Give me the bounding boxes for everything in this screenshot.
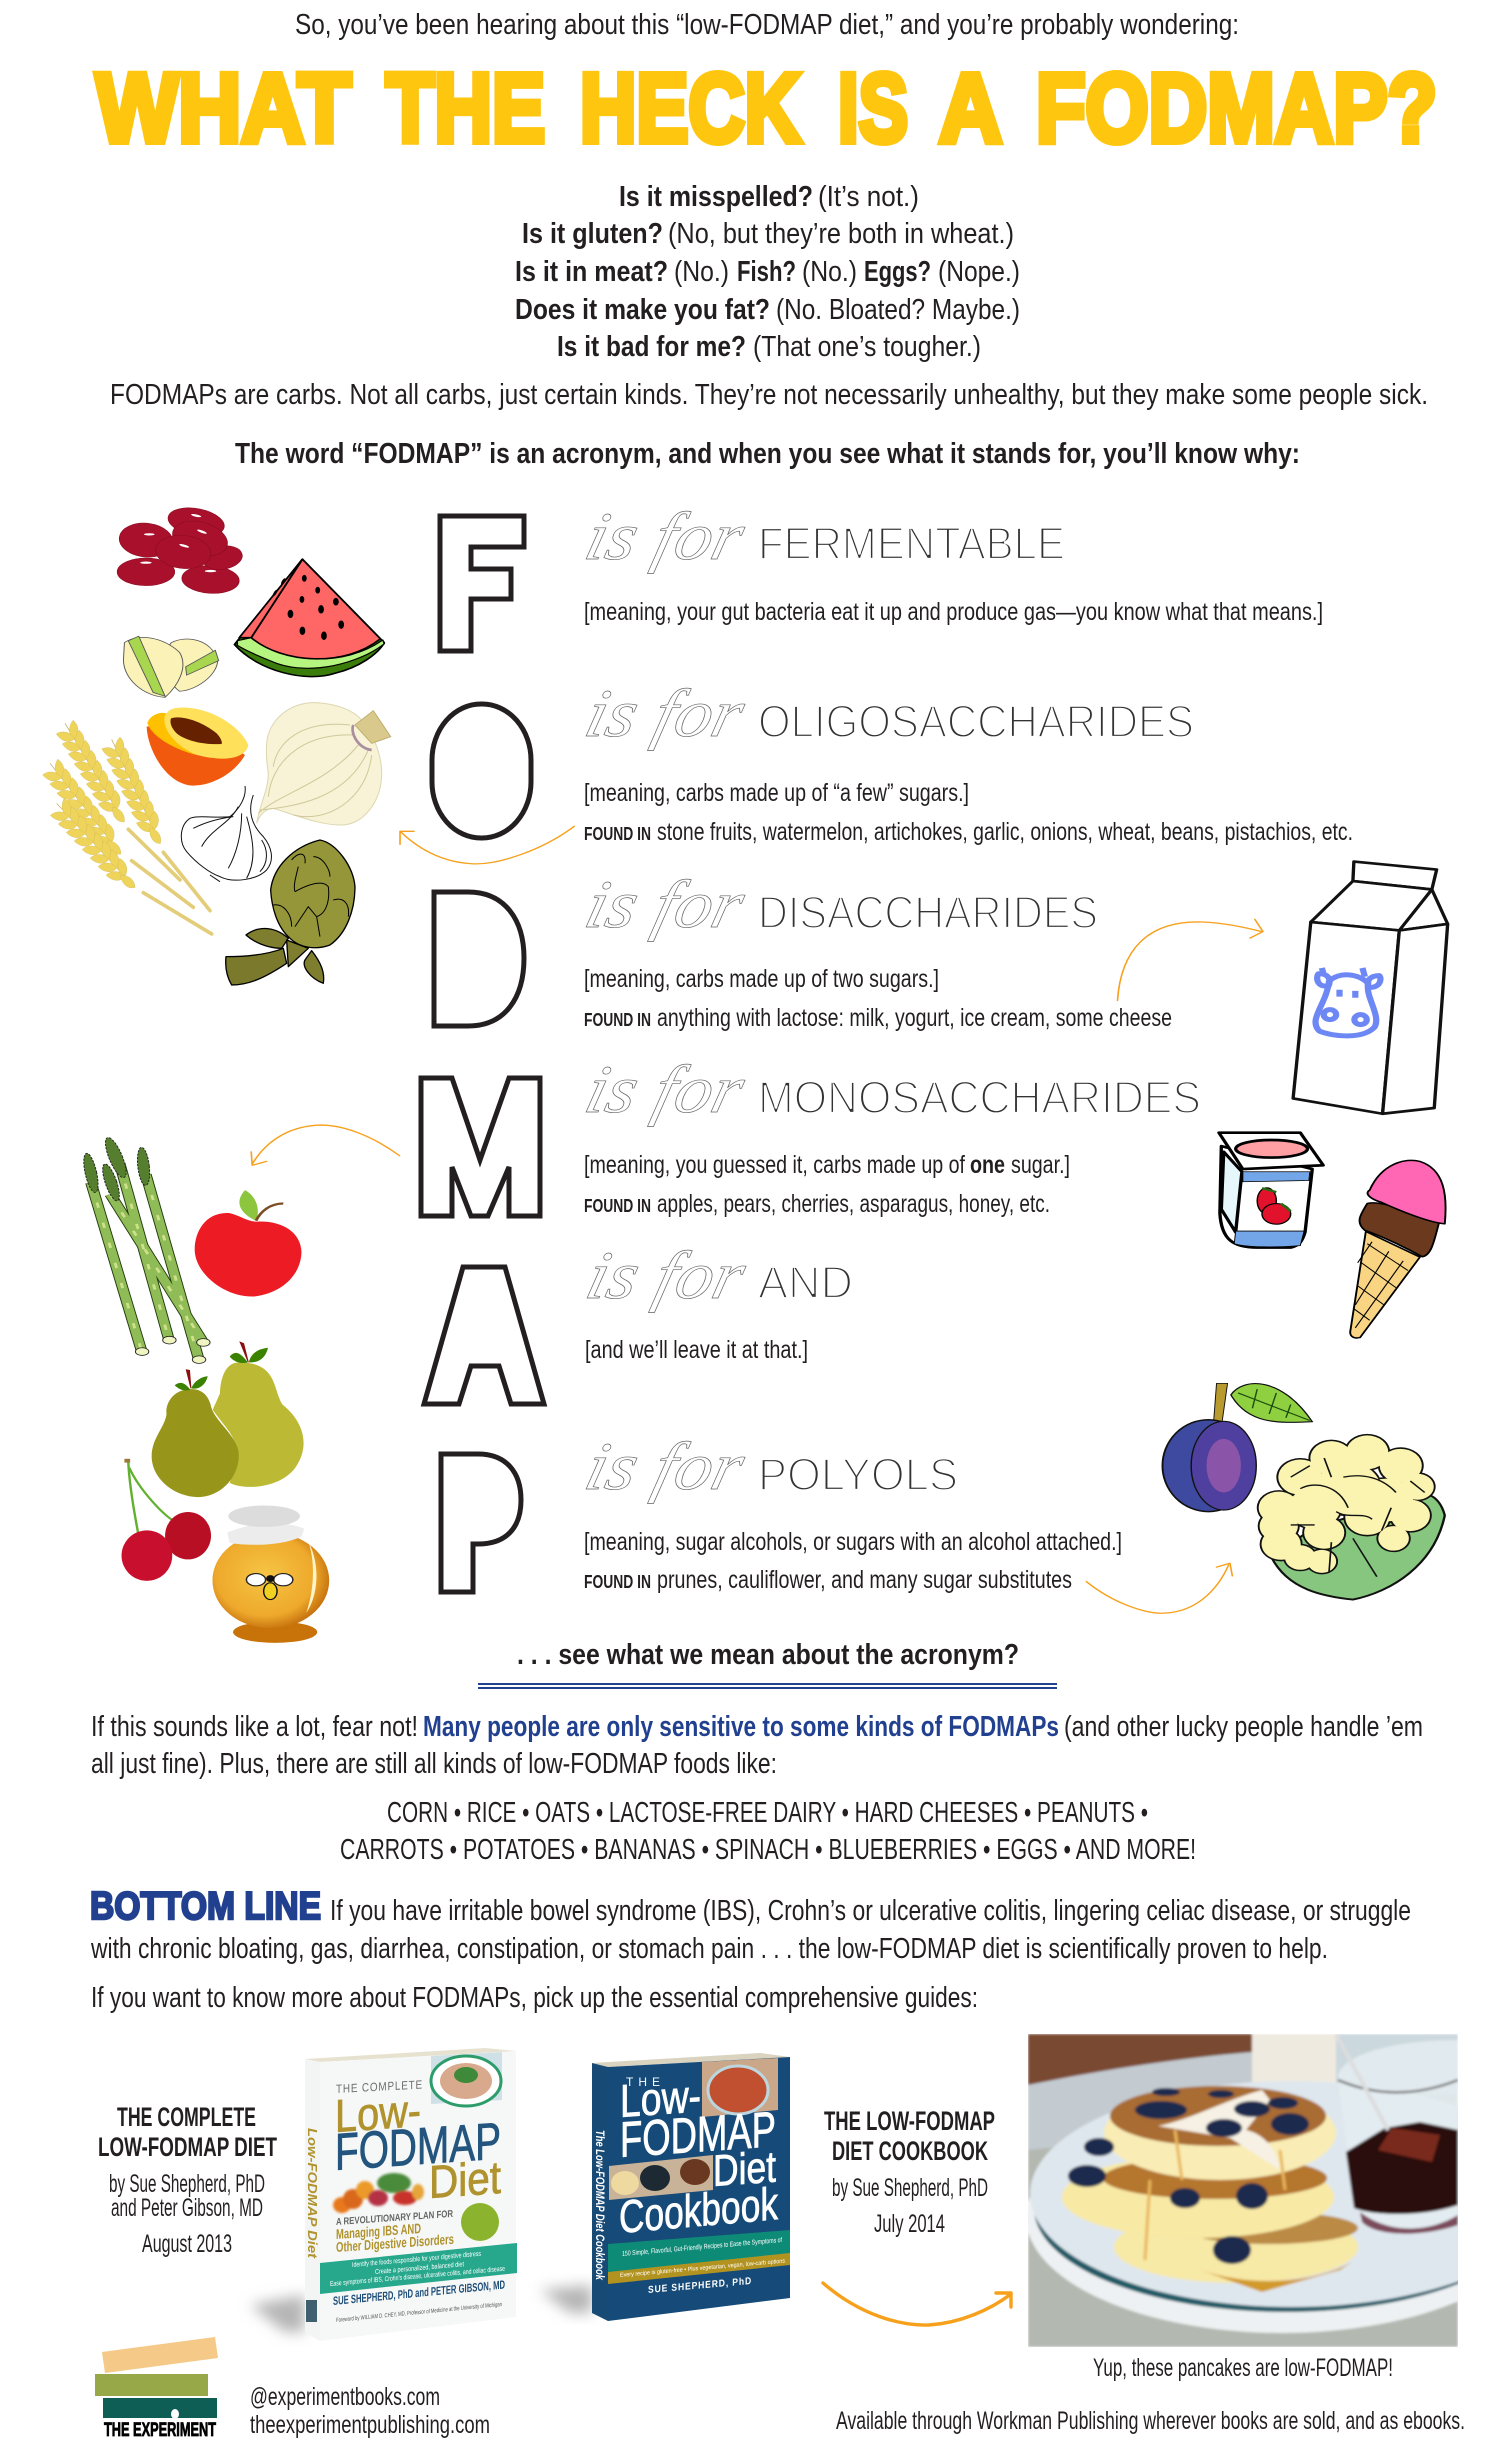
icon: wheat bbox=[38, 716, 212, 934]
sensitivity paragraph: Many people are only sensitive to some kinds of FODMAPs bbox=[423, 1711, 1059, 1743]
book 1 cover: Low- bbox=[335, 2084, 421, 2142]
icon: onion bbox=[257, 703, 391, 825]
book 1 cover: SUE SHEPHERD, PhD and PETER GIBSON, MD bbox=[333, 2277, 505, 2308]
book 1 details: THE COMPLETE bbox=[117, 2102, 256, 2132]
low-FODMAP foods list: CARROTS • POTATOES • BANANAS • SPINACH • BLUEBERRIES • EGGS • AND MORE! bbox=[340, 1834, 1196, 1866]
book 1 cover: Create a personalized, balanced diet bbox=[375, 2261, 464, 2276]
publisher logo bbox=[95, 2337, 218, 2441]
D entry bbox=[578, 866, 1172, 1032]
letter A bbox=[424, 1267, 544, 1404]
icon: cow logo bbox=[1316, 968, 1380, 1036]
icon: asparagus bbox=[81, 1136, 210, 1363]
A entry: is for bbox=[579, 1237, 754, 1313]
book 2 details: DIET COOKBOOK bbox=[832, 2136, 988, 2166]
book 2 cover: THE bbox=[626, 2075, 665, 2089]
book 1 cover: Ease symptoms of IBS, Crohn’s disease, ulcerative colitis, and celiac disease bbox=[330, 2266, 505, 2288]
D entry: anything with lactose: milk, yogurt, ice cream, some cheese bbox=[657, 1004, 1172, 1032]
questions block: Is it misspelled? bbox=[619, 181, 813, 213]
book 1 cover: Diet bbox=[429, 2151, 501, 2208]
letter P bbox=[441, 1454, 521, 1592]
publisher contacts: theexperimentpublishing.com bbox=[250, 2411, 490, 2439]
icon: kidney beans bbox=[116, 503, 246, 595]
lower-right food illustrations bbox=[1086, 1133, 1446, 1613]
M entry: is for bbox=[578, 1051, 753, 1127]
book 1 cover: Foreword by WILLIAM D. CHEY, MD, Professor of Medicine at the University of Michigan bbox=[336, 2302, 502, 2324]
book 2 cover: SUE SHEPHERD, PhD bbox=[648, 2276, 752, 2296]
arrow: to pancakes bbox=[823, 2283, 1011, 2325]
title: HECK bbox=[580, 54, 801, 162]
M entry: one bbox=[970, 1151, 1005, 1179]
sensitivity paragraph bbox=[91, 1711, 1423, 1780]
book 2 cover: Every recipe is gluten-free • Plus vegetarian, vegan, low-carb options bbox=[620, 2259, 785, 2279]
sensitivity paragraph: If this sounds like a lot, fear not! bbox=[91, 1711, 418, 1743]
bottom line paragraph: BOTTOM LINE bbox=[90, 1885, 321, 1928]
P entry bbox=[578, 1428, 1122, 1594]
book 2 details bbox=[824, 2106, 995, 2238]
icon: plum with leaf bbox=[1162, 1383, 1312, 1512]
book 2 cover bbox=[540, 2053, 790, 2321]
book 1 cover: THE COMPLETE bbox=[336, 2077, 423, 2096]
questions block: Fish? bbox=[737, 256, 796, 288]
icon: cauliflower bbox=[1257, 1434, 1445, 1600]
letter M bbox=[421, 1078, 540, 1216]
icon: honey jar bbox=[212, 1505, 329, 1643]
book 1 details: LOW-FODMAP DIET bbox=[98, 2132, 277, 2162]
right-side dairy illustrations bbox=[1117, 862, 1448, 1114]
P entry: POLYOLS bbox=[758, 1449, 958, 1500]
low-FODMAP foods list bbox=[340, 1797, 1196, 1866]
A entry: [and we’ll leave it at that.] bbox=[585, 1336, 808, 1364]
book 1 cover: Other Digestive Disorders bbox=[336, 2231, 454, 2255]
title bbox=[96, 54, 1437, 162]
low-FODMAP foods list: CORN • RICE • OATS • LACTOSE-FREE DAIRY • HARD CHEESES • PEANUTS • bbox=[387, 1797, 1148, 1829]
sensitivity paragraph: all just fine). Plus, there are still all kinds of low-FODMAP foods like: bbox=[91, 1748, 777, 1780]
closing line: . . . see what we mean about the acronym? bbox=[517, 1639, 1019, 1671]
icon: pears bbox=[152, 1341, 304, 1497]
M entry bbox=[578, 1051, 1201, 1218]
O entry: is for bbox=[578, 675, 753, 751]
M entry: MONOSACCHARIDES bbox=[758, 1072, 1201, 1123]
icon: pistachios bbox=[123, 636, 219, 697]
icon: ice cream cone bbox=[1350, 1160, 1446, 1338]
arrow: polyols to foods bbox=[1086, 1563, 1232, 1613]
publisher contacts: @experimentbooks.com bbox=[250, 2383, 440, 2411]
O entry: FOUND IN bbox=[584, 824, 651, 844]
book 2 cover: FODMAP bbox=[620, 2101, 776, 2168]
P entry: FOUND IN bbox=[584, 1572, 651, 1592]
book 1 cover bbox=[250, 2048, 517, 2341]
icon: garlic bbox=[181, 786, 271, 882]
book 2 details: July 2014 bbox=[874, 2210, 945, 2238]
book 1 cover: Low-FODMAP Diet bbox=[305, 2128, 320, 2259]
title: IS bbox=[838, 54, 908, 162]
F entry: is for bbox=[578, 498, 753, 574]
acronym lead-in: The word “FODMAP” is an acronym, and when you see what it stands for, you’ll know why: bbox=[235, 438, 1300, 470]
photo: pancakes bbox=[1026, 2034, 1500, 2347]
D entry: is for bbox=[578, 866, 753, 942]
questions block: (No.) bbox=[674, 256, 729, 288]
P entry: [meaning, sugar alcohols, or sugars with an alcohol attached.] bbox=[584, 1528, 1122, 1556]
icon: apple bbox=[195, 1190, 301, 1297]
questions block: Eggs? bbox=[864, 256, 931, 288]
questions block: Is it gluten? bbox=[522, 218, 663, 250]
M entry: sugar.] bbox=[1011, 1151, 1070, 1179]
guides lead-in: If you want to know more about FODMAPs, pick up the essential comprehensive guides: bbox=[91, 1982, 978, 2014]
questions block: (No. Bloated? Maybe.) bbox=[776, 294, 1020, 326]
icon: yogurt cup bbox=[1219, 1133, 1323, 1248]
arrow: disaccharides to milk bbox=[1117, 919, 1263, 1000]
book 2 cover: The Low-FODMAP Diet Cookbook bbox=[593, 2130, 607, 2281]
publisher logo: THE EXPERIMENT bbox=[104, 2420, 216, 2441]
questions block: Is it bad for me? bbox=[557, 331, 746, 363]
F entry bbox=[578, 498, 1323, 626]
bottom line paragraph bbox=[90, 1885, 1411, 1965]
D entry: FOUND IN bbox=[584, 1010, 651, 1030]
book 1 details bbox=[98, 2102, 277, 2258]
O entry bbox=[578, 675, 1353, 846]
F entry: FERMENTABLE bbox=[758, 518, 1065, 569]
book 2 cover: Cookbook bbox=[619, 2177, 779, 2243]
book 1 cover: FODMAP bbox=[335, 2112, 501, 2182]
questions block: (Nope.) bbox=[938, 256, 1020, 288]
arrow: oligosaccharides to foods bbox=[400, 826, 574, 864]
P entry: prunes, cauliflower, and many sugar substitutes bbox=[657, 1566, 1072, 1594]
icon: cherries bbox=[122, 1459, 211, 1581]
title: THE bbox=[386, 54, 545, 162]
book 1 details: and Peter Gibson, MD bbox=[111, 2194, 263, 2222]
arrow: monosaccharides to foods bbox=[251, 1125, 400, 1165]
book 2 cover: Diet bbox=[713, 2143, 776, 2196]
questions block: (It’s not.) bbox=[818, 181, 919, 213]
questions block bbox=[515, 181, 1020, 363]
book 1 cover: A REVOLUTIONARY PLAN FOR bbox=[336, 2209, 454, 2228]
book 2 details: by Sue Shepherd, PhD bbox=[832, 2174, 988, 2202]
icon: milk carton bbox=[1293, 862, 1448, 1114]
upper-left food illustrations bbox=[116, 503, 384, 697]
book 1 details: by Sue Shepherd, PhD bbox=[109, 2170, 265, 2198]
middle-left food illustrations bbox=[38, 703, 391, 985]
title: WHAT bbox=[96, 54, 351, 162]
questions block: Is it in meat? bbox=[515, 256, 668, 288]
icon: stone fruit half bbox=[147, 708, 248, 786]
publisher contacts bbox=[250, 2383, 490, 2439]
M entry: FOUND IN bbox=[584, 1196, 651, 1216]
F entry: [meaning, your gut bacteria eat it up and produce gas—you know what that means.] bbox=[584, 598, 1323, 626]
M entry: [meaning, you guessed it, carbs made up of bbox=[584, 1151, 965, 1179]
O entry: OLIGOSACCHARIDES bbox=[758, 696, 1194, 747]
title: A bbox=[939, 54, 1002, 162]
icon: watermelon slice bbox=[234, 559, 384, 677]
P entry: is for bbox=[578, 1428, 753, 1504]
letter D bbox=[434, 892, 524, 1026]
icon: artichoke bbox=[226, 840, 355, 985]
book 1 cover: Identify the foods responsible for your digestive distress bbox=[352, 2251, 481, 2269]
M entry: apples, pears, cherries, asparagus, honey, etc. bbox=[657, 1190, 1050, 1218]
double rule bbox=[478, 1683, 1057, 1689]
book 1 details: August 2013 bbox=[142, 2230, 232, 2258]
D entry: DISACCHARIDES bbox=[758, 887, 1098, 938]
D entry: [meaning, carbs made up of two sugars.] bbox=[584, 965, 939, 993]
lower-left food illustrations bbox=[81, 1125, 400, 1643]
A entry: AND bbox=[758, 1257, 853, 1308]
letter F bbox=[440, 516, 524, 651]
questions block: (That one’s tougher.) bbox=[753, 331, 981, 363]
intro line: So, you’ve been hearing about this “low-FODMAP diet,” and you’re probably wondering: bbox=[295, 9, 1239, 41]
questions block: Does it make you fat? bbox=[515, 294, 770, 326]
O entry: [meaning, carbs made up of “a few” sugars.] bbox=[584, 779, 969, 807]
A entry bbox=[579, 1237, 853, 1364]
book 2 details: THE LOW-FODMAP bbox=[824, 2106, 995, 2136]
book 2 cover: Low- bbox=[620, 2069, 701, 2127]
book 2 cover: 150 Simple, Flavorful, Gut-Friendly Recipes to Ease the Symptoms of bbox=[622, 2237, 782, 2258]
questions block: (No, but they’re both in wheat.) bbox=[668, 218, 1014, 250]
questions block: (No.) bbox=[802, 256, 857, 288]
book 1 cover: Managing IBS AND bbox=[336, 2220, 421, 2242]
letter O bbox=[432, 704, 531, 838]
